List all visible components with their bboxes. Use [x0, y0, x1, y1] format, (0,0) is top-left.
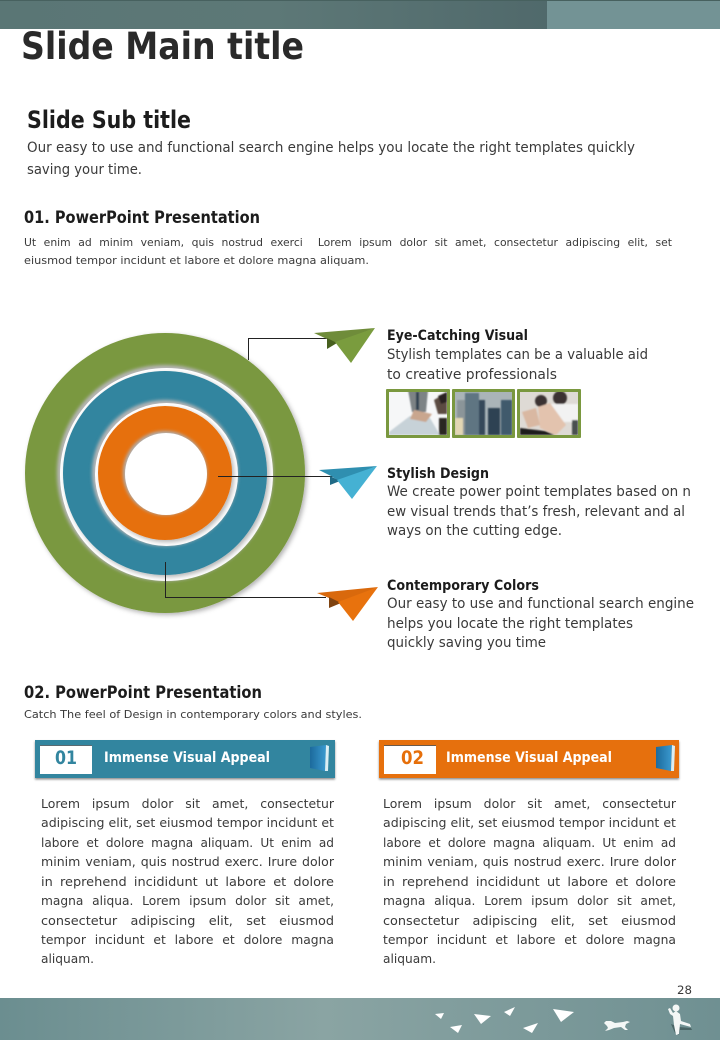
callout text: Our easy to use and functional search engine	[387, 596, 694, 612]
callout heading: Eye-Catching Visual	[387, 328, 528, 344]
connector: green ring to green plane	[248, 338, 328, 360]
section 02 text: Catch The feel of Design in contemporary colors and styles.	[24, 709, 362, 721]
callout heading: Stylish Design	[387, 466, 489, 482]
text block: left column: labore et dolore magna aliquam. Ut enim ad	[41, 835, 334, 850]
section 02	[24, 683, 362, 721]
banner heading: Immense Visual Appeal	[104, 750, 270, 766]
text block: right column: labore et dolore magna aliquam. Ut enim ad	[383, 835, 676, 850]
callout text: quickly saving you time	[387, 635, 546, 651]
page number: 28	[677, 983, 692, 997]
callout: contemporary colors	[387, 578, 694, 651]
callout text: helps you locate the right templates	[387, 616, 633, 632]
text block: right column: minim veniam, quis nostrud exerc. Irure dolor	[383, 854, 677, 869]
panel: blue banner 01	[35, 740, 335, 778]
text block: left column: in reprehend incididunt ut labore et dolore	[41, 874, 334, 889]
section 02 heading: 02. PowerPoint Presentation	[24, 683, 262, 703]
callout text: Stylish templates can be a valuable aid	[387, 347, 648, 363]
text block: left column	[41, 796, 335, 966]
text block: right column: Lorem ipsum dolor sit amet, consectetur	[383, 796, 677, 811]
text block: right column: consectetur adipiscing elit, set eiusmod	[383, 913, 676, 928]
text block: right column: tempor incidunt et labore et dolore magna	[383, 932, 676, 947]
section 01	[24, 208, 672, 267]
text block: left column: magna aliqua. Lorem ipsum dolor sit amet,	[41, 893, 334, 908]
callout text: to creative professionals	[387, 367, 557, 383]
middle blue ring	[63, 371, 267, 575]
footer band	[0, 998, 720, 1040]
panel: orange banner 02	[379, 740, 679, 778]
subtitle block	[27, 106, 635, 178]
photo: city skyscrapers	[452, 389, 515, 438]
icon: blue paper plane	[319, 466, 377, 499]
sub title description: saving your time.	[27, 162, 142, 178]
photo: clapping hands	[517, 389, 581, 438]
callout text	[387, 347, 648, 383]
icon: running dog	[604, 1021, 630, 1031]
section 01 text: Ut enim ad minim veniam, quis nostrud exerci Lorem ipsum dolor sit amet, consectetur adipiscing elit, set	[24, 237, 672, 249]
sub title description	[27, 140, 635, 178]
callout text: ew visual trends that’s fresh, relevant and al	[387, 504, 685, 520]
icon: running child	[668, 1004, 692, 1035]
text block: left column: tempor incidunt et labore et dolore magna	[41, 932, 334, 947]
text block: right column: adipiscing elit, set eiusmod tempor incidunt et	[383, 815, 676, 830]
photo: team meeting	[386, 389, 450, 438]
icon: flock of paper planes	[435, 1007, 574, 1033]
callout: stylish design	[387, 466, 691, 539]
text block: right column: in reprehend incididunt ut labore et dolore	[383, 874, 676, 889]
title: Slide Main title	[21, 25, 304, 68]
icon: orange paper plane	[317, 587, 378, 621]
number box 02: 02	[401, 747, 424, 769]
icon: green paper plane	[314, 328, 375, 363]
text block: left column: adipiscing elit, set eiusmod tempor incidunt et	[41, 815, 334, 830]
sub title description: Our easy to use and functional search engine helps you locate the right templates quickly	[27, 140, 635, 156]
number box 02	[384, 745, 436, 774]
connector: blue ring to orange plane	[166, 562, 326, 598]
connector: orange ring to blue plane	[218, 476, 334, 478]
section 01 text: eiusmod tempor incidunt et labore et dolore magna aliquam.	[24, 255, 369, 267]
concentric rings chart	[25, 333, 305, 613]
callout: eye-catching visual	[386, 328, 648, 438]
text block: left column: consectetur adipiscing elit, set eiusmod	[41, 913, 334, 928]
number box 01	[40, 745, 92, 774]
callout text	[387, 596, 694, 651]
text block: left column: aliquam.	[41, 951, 94, 966]
banner heading: Immense Visual Appeal	[446, 750, 612, 766]
icon: blue book	[656, 745, 675, 771]
number box 01: 01	[55, 747, 77, 769]
callout text	[387, 484, 691, 539]
inner orange ring	[98, 406, 232, 540]
text block: right column: aliquam.	[383, 951, 436, 966]
text block: right column	[383, 796, 677, 966]
callout heading: Contemporary Colors	[387, 578, 539, 594]
callout text: ways on the cutting edge.	[387, 523, 562, 539]
text block: left column: minim veniam, quis nostrud exerc. Irure dolor	[41, 854, 335, 869]
section 01 heading: 01. PowerPoint Presentation	[24, 208, 260, 228]
top banner	[0, 0, 720, 29]
icon: blue book	[310, 745, 329, 771]
outer green ring	[25, 333, 305, 613]
callout text: We create power point templates based on n	[387, 484, 691, 500]
sub title heading: Slide Sub title	[27, 106, 191, 134]
text block: left column: Lorem ipsum dolor sit amet, consectetur	[41, 796, 335, 811]
section 01 text	[24, 237, 672, 267]
text block: right column: magna aliqua. Lorem ipsum dolor sit amet,	[383, 893, 676, 908]
